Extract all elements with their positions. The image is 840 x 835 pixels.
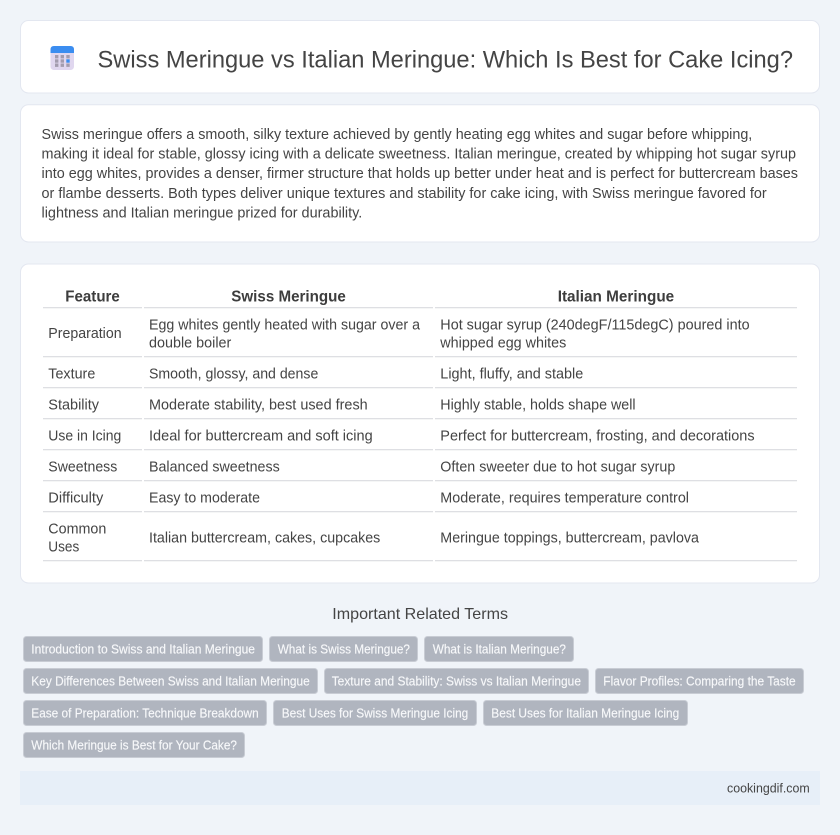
icon: calendar xyxy=(50,46,74,70)
tag xyxy=(274,700,476,726)
table row: stability: Stability xyxy=(48,397,100,413)
text block: introduction paragraph xyxy=(42,127,798,221)
table header row: Italian Meringue xyxy=(558,288,675,305)
title: Swiss Meringue vs Italian Meringue: Which Is Best for Cake Icing? xyxy=(98,46,793,74)
table row: sweetness: Balanced sweetness xyxy=(149,460,280,476)
table row: stability: Moderate stability, best used fresh xyxy=(149,397,368,413)
table row: texture: Texture xyxy=(48,366,95,382)
table row: difficulty: Easy to moderate xyxy=(149,490,260,506)
footer xyxy=(20,771,820,805)
tag xyxy=(24,668,318,694)
tag: Introduction to Swiss and Italian Meringue xyxy=(31,642,255,656)
tag xyxy=(24,732,244,758)
table row: preparation: Hot sugar syrup (240degF/115degC) poured into xyxy=(440,317,750,333)
tag: Key Differences Between Swiss and Italian Meringue xyxy=(31,674,310,688)
text block: introduction paragraph: or flambe desserts. Both types deliver unique textures and stability for cake icing, with Swiss meringue favored for xyxy=(42,186,767,202)
table row: common uses: Common xyxy=(48,521,106,537)
tag: Best Uses for Swiss Meringue Icing xyxy=(282,706,468,720)
tag: Ease of Preparation: Technique Breakdown xyxy=(31,706,259,720)
table header row: Feature xyxy=(65,288,120,305)
table row: preparation: Preparation xyxy=(48,326,122,342)
table row: sweetness xyxy=(48,460,675,476)
tag: Flavor Profiles: Comparing the Taste xyxy=(603,674,796,688)
table row: use in icing xyxy=(48,428,755,444)
table row: use in icing: Use in Icing xyxy=(48,428,121,444)
tag: What is Italian Meringue? xyxy=(433,642,566,656)
table row: difficulty: Moderate, requires temperature control xyxy=(440,490,689,506)
table row: preparation xyxy=(48,317,750,351)
text block: introduction paragraph: making it ideal for stable, glossy icing with a delicate sweetness. Italian meringue, created by whipping hot sugar syrup xyxy=(42,147,796,163)
text block: introduction paragraph: Swiss meringue offers a smooth, silky texture achieved by gently heating egg whites and sugar before whipping, xyxy=(42,127,752,143)
table row: common uses: Italian buttercream, cakes, cupcakes xyxy=(149,530,380,546)
tag xyxy=(484,700,688,726)
table row: stability xyxy=(48,397,636,413)
tag: Best Uses for Italian Meringue Icing xyxy=(491,706,679,720)
tag xyxy=(324,668,588,694)
table row: difficulty: Difficulty xyxy=(48,490,104,506)
tag: Which Meringue is Best for Your Cake? xyxy=(31,738,237,752)
panel: header xyxy=(20,20,820,93)
table row: preparation: double boiler xyxy=(149,335,231,351)
text block: introduction paragraph: lightness and Italian meringue prized for durability. xyxy=(42,205,362,221)
table header row xyxy=(65,288,675,305)
table row: sweetness: Sweetness xyxy=(48,460,117,476)
tag xyxy=(24,636,262,662)
footer: cookingdif.com xyxy=(727,780,810,795)
table row: use in icing: Perfect for buttercream, frosting, and decorations xyxy=(440,428,755,444)
tag xyxy=(24,700,266,726)
table row: sweetness: Often sweeter due to hot sugar syrup xyxy=(440,460,675,476)
table row: common uses: Uses xyxy=(48,539,79,555)
table row: use in icing: Ideal for buttercream and soft icing xyxy=(149,428,373,444)
heading: important related terms: Important Related Terms xyxy=(332,606,508,623)
table row: common uses xyxy=(48,521,700,555)
table row: stability: Highly stable, holds shape well xyxy=(440,397,636,413)
table row: texture: Light, fluffy, and stable xyxy=(440,366,583,382)
panel: comparison table xyxy=(20,264,820,583)
panel: introduction xyxy=(20,105,820,242)
table row: texture xyxy=(48,366,583,382)
table row: common uses: Meringue toppings, buttercream, pavlova xyxy=(440,530,700,546)
tag xyxy=(596,668,804,694)
tag: What is Swiss Meringue? xyxy=(278,642,410,656)
table row: preparation: Egg whites gently heated with sugar over a xyxy=(149,317,421,333)
tag: Texture and Stability: Swiss vs Italian Meringue xyxy=(332,674,581,688)
table row: texture: Smooth, glossy, and dense xyxy=(149,366,318,382)
tag xyxy=(270,636,418,662)
panel: related term tags xyxy=(24,636,804,758)
text block: introduction paragraph: into egg whites, provides a denser, firmer structure that holds up better under heat and is perfect for buttercream bases xyxy=(42,166,798,182)
table row: difficulty xyxy=(48,490,689,506)
tag xyxy=(424,636,574,662)
table header row: Swiss Meringue xyxy=(231,288,346,305)
table row: preparation: whipped egg whites xyxy=(439,335,566,351)
